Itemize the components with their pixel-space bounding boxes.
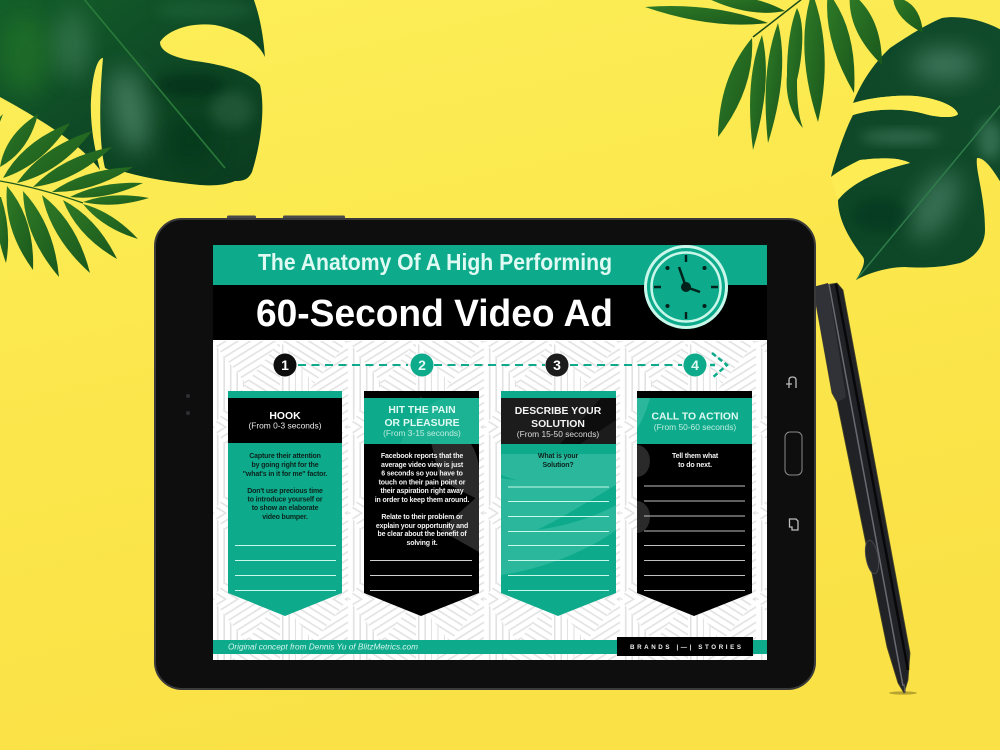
panel: hit the pain or pleasure: Relate to their problem or	[381, 514, 463, 521]
panel: hook: to show an elaborate	[252, 505, 319, 512]
panel: describe your solution: Solution?	[543, 462, 573, 469]
tablet body	[155, 216, 815, 689]
brand logo box	[617, 637, 753, 656]
panel: call to action: Tell them what	[672, 453, 719, 460]
panel: hit the pain or pleasure: HIT THE PAIN	[388, 405, 456, 416]
panel: hit the pain or pleasure: explain your opportunity and	[376, 523, 468, 530]
timeline: 3	[553, 357, 561, 373]
arrow head	[710, 353, 727, 378]
panel: hit the pain or pleasure: touch on their pain point or	[379, 480, 466, 486]
panel: describe your solution: What is your	[538, 453, 579, 460]
panel: call to action: to do next.	[678, 462, 712, 469]
panel: hit the pain or pleasure: solving it.	[406, 540, 438, 547]
footer bar with credit	[213, 640, 767, 654]
footer bar with credit: Original concept from Dennis Yu of BlitzMetrics.com	[228, 642, 418, 652]
panel: call to action: CALL TO ACTION	[652, 412, 738, 422]
brand logo box: BRANDS |—| STORIES	[630, 644, 741, 651]
panel: hit the pain or pleasure: 6 seconds so you have to	[381, 470, 463, 478]
panel: hook: HOOK	[269, 411, 301, 422]
panel: hook: video bumper.	[262, 514, 308, 521]
top-left monstera leaf	[0, 0, 265, 185]
panel: describe your solution: SOLUTION	[531, 419, 585, 430]
panel: call to action	[637, 391, 752, 616]
top-left palm frond	[0, 114, 149, 277]
hatched screen background	[213, 341, 767, 660]
panel: hook: (From 0-3 seconds)	[248, 420, 322, 430]
panel: hit the pain or pleasure: average video view is just	[381, 462, 464, 469]
panel: hit the pain or pleasure: be clear about the benefit of	[378, 531, 467, 538]
panel: hook	[228, 391, 342, 616]
panel: hook: Capture their attention	[249, 453, 321, 460]
black main heading band: 60-Second Video Ad	[256, 293, 613, 335]
black main heading band	[213, 285, 767, 340]
infographic screen	[213, 245, 767, 660]
top-right monstera leaf	[831, 17, 1000, 280]
teal title banner: The Anatomy Of A High Performing	[258, 249, 612, 275]
panel: hit the pain or pleasure	[364, 391, 479, 616]
timeline: 1	[281, 357, 289, 373]
panel: hit the pain or pleasure: Facebook reports that the	[381, 453, 463, 460]
panel: describe your solution	[501, 391, 616, 616]
panel: hit the pain or pleasure: their aspiration right away	[380, 488, 464, 495]
timeline: 2	[418, 357, 426, 373]
panel: hit the pain or pleasure: in order to keep them around.	[375, 497, 469, 504]
panel: hit the pain or pleasure: (From 3-15 seconds)	[383, 428, 461, 438]
panel: hook: "what's in it for me" factor.	[243, 471, 327, 478]
panel: describe your solution: (From 15-50 seconds)	[517, 429, 599, 439]
panel: hook: by going right for the	[251, 462, 319, 469]
stylus pen	[813, 283, 917, 695]
teal title banner	[213, 245, 767, 285]
panel: describe your solution: DESCRIBE YOUR	[515, 406, 602, 417]
icon: clock	[644, 245, 728, 329]
timeline	[274, 353, 727, 378]
panel: hook: to introduce yourself or	[248, 496, 323, 504]
panel: hit the pain or pleasure: OR PLEASURE	[384, 418, 460, 429]
top-right palm frond	[645, 0, 923, 150]
panel: hook: Don't use precious time	[247, 488, 323, 495]
panel: call to action: (From 50-60 seconds)	[654, 422, 736, 432]
timeline: 4	[691, 357, 699, 373]
